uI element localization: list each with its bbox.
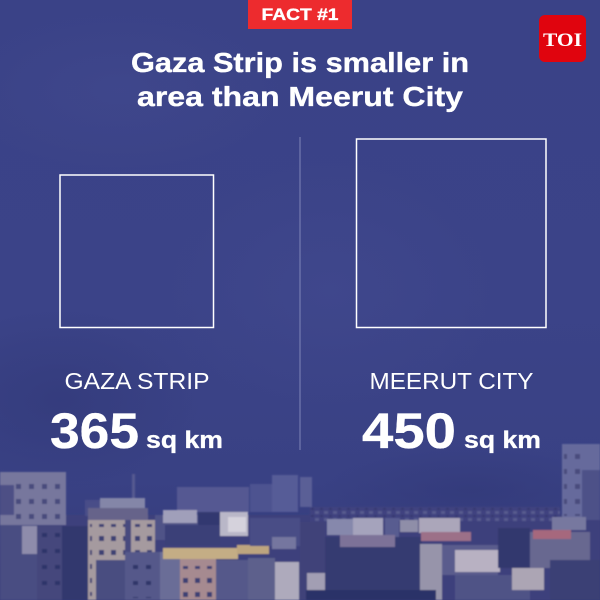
badge: fact number bbox=[248, 0, 352, 29]
base band bbox=[0, 515, 600, 600]
divider line bbox=[300, 137, 301, 450]
city skyline photo bbox=[0, 444, 600, 600]
square: Gaza Strip area bbox=[60, 175, 214, 328]
right of centre bbox=[300, 522, 325, 600]
value: Gaza Strip 365 sq km: 365 bbox=[50, 403, 139, 459]
value: Meerut City 450 sq km bbox=[362, 403, 541, 459]
square: Meerut City area bbox=[356, 139, 546, 328]
value: Meerut City 450 sq km: sq km bbox=[464, 427, 541, 454]
left row buildings bbox=[0, 525, 37, 600]
label: Gaza Strip: GAZA STRIP bbox=[64, 368, 210, 394]
far left tower bbox=[0, 472, 66, 525]
value: Gaza Strip 365 sq km bbox=[50, 403, 223, 459]
logo: TOI: TOI bbox=[543, 30, 582, 51]
logo: TOI bbox=[539, 15, 586, 62]
foreground centre-left bbox=[96, 560, 126, 600]
title: Gaza Strip is smaller in bbox=[131, 47, 469, 78]
value: Gaza Strip 365 sq km: sq km bbox=[146, 427, 223, 454]
value: Meerut City 450 sq km: 450 bbox=[362, 403, 456, 459]
mid hazy buildings bbox=[177, 487, 249, 512]
title bbox=[131, 47, 469, 112]
right tower bbox=[562, 444, 600, 519]
label: Meerut City: MEERUT CITY bbox=[370, 368, 534, 394]
title: area than Meerut City bbox=[137, 81, 463, 112]
badge: fact number: FACT #1 bbox=[262, 6, 338, 24]
